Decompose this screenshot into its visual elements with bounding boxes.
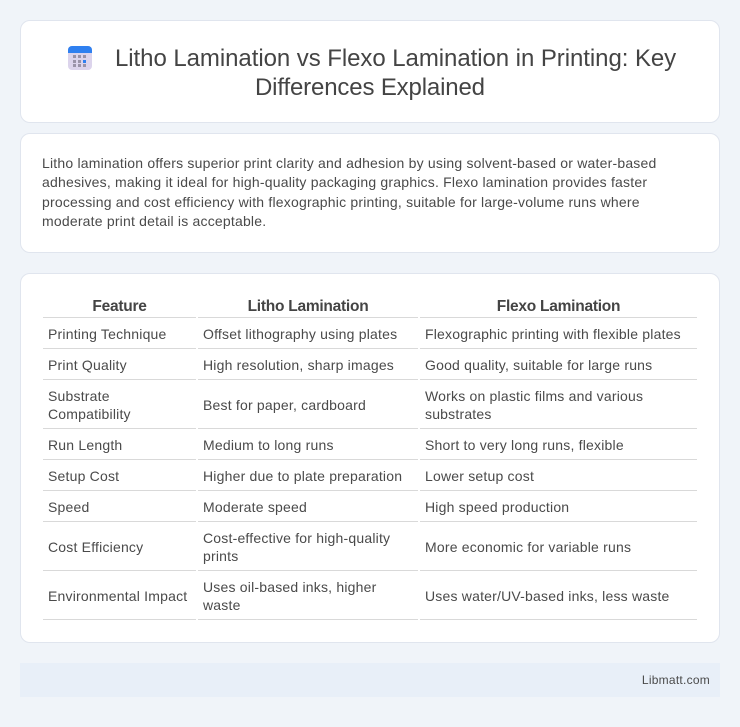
comparison table xyxy=(43,298,697,620)
comparison table panel xyxy=(20,273,720,643)
row: Cost Efficiency: prints xyxy=(203,548,238,564)
row: Print Quality xyxy=(48,357,652,373)
row: Setup Cost xyxy=(48,468,534,484)
row: Setup Cost: Lower setup cost xyxy=(425,468,534,484)
header: Flexo Lamination: Flexo Lamination xyxy=(497,298,620,315)
row: Cost Efficiency xyxy=(48,530,631,564)
footer bar xyxy=(20,663,720,697)
row: Run Length: Run Length xyxy=(48,437,122,453)
intro paragraph: Litho lamination offers superior print clarity and adhesion by using solvent-based or water-based xyxy=(42,155,656,171)
row: Environmental Impact: Uses oil-based inks, higher xyxy=(203,579,376,595)
intro paragraph: moderate print detail is acceptable. xyxy=(42,213,266,229)
row: Speed xyxy=(48,499,569,515)
icon: calendar xyxy=(68,46,92,70)
row: Speed: Speed xyxy=(48,499,89,515)
intro paragraph xyxy=(42,155,656,229)
row: Setup Cost: Setup Cost xyxy=(48,468,119,484)
row: Substrate Compatibility: Compatibility xyxy=(48,406,131,422)
row: Run Length xyxy=(48,437,624,453)
row: Print Quality: High resolution, sharp images xyxy=(203,357,394,373)
footer credit: Libmatt.com xyxy=(642,673,710,687)
row: Substrate Compatibility: substrates xyxy=(425,406,492,422)
row: Print Quality: Print Quality xyxy=(48,357,127,373)
row: Substrate Compatibility: Substrate xyxy=(48,388,110,404)
row: Printing Technique: Offset lithography using plates xyxy=(203,326,397,342)
row: Substrate Compatibility: Works on plastic films and various xyxy=(425,388,643,404)
row: Substrate Compatibility xyxy=(48,388,643,422)
row: Environmental Impact: Environmental Impact xyxy=(48,588,187,604)
header card xyxy=(20,20,720,123)
row: Printing Technique: Flexographic printing with flexible plates xyxy=(425,326,681,342)
row: Substrate Compatibility: Best for paper, cardboard xyxy=(203,397,366,413)
intro paragraph: adhesives, making it ideal for high-quality packaging graphics. Flexo lamination provides faster xyxy=(42,174,647,190)
intro paragraph: processing and cost efficiency with flexographic printing, suitable for large-volume runs where xyxy=(42,194,640,210)
row: Speed: Moderate speed xyxy=(203,499,307,515)
title xyxy=(115,45,676,101)
row: Printing Technique: Printing Technique xyxy=(48,326,167,342)
row: Environmental Impact: Uses water/UV-based inks, less waste xyxy=(425,588,670,604)
header: Litho Lamination: Litho Lamination xyxy=(248,298,368,315)
row: Run Length: Short to very long runs, flexible xyxy=(425,437,624,453)
row: Speed: High speed production xyxy=(425,499,569,515)
row: Environmental Impact xyxy=(48,579,670,613)
row: Cost Efficiency: Cost-effective for high-quality xyxy=(203,530,390,546)
row: Run Length: Medium to long runs xyxy=(203,437,334,453)
row: Cost Efficiency: Cost Efficiency xyxy=(48,539,143,555)
title: Litho Lamination vs Flexo Lamination in Printing: Key xyxy=(115,45,676,72)
row: Cost Efficiency: More economic for variable runs xyxy=(425,539,631,555)
row: Print Quality: Good quality, suitable for large runs xyxy=(425,357,652,373)
row: Setup Cost: Higher due to plate preparation xyxy=(203,468,402,484)
row: Printing Technique xyxy=(48,326,681,342)
header: Feature: Feature xyxy=(92,298,147,315)
intro text panel xyxy=(20,133,720,253)
row: Environmental Impact: waste xyxy=(203,597,241,613)
title: Differences Explained xyxy=(255,74,485,101)
